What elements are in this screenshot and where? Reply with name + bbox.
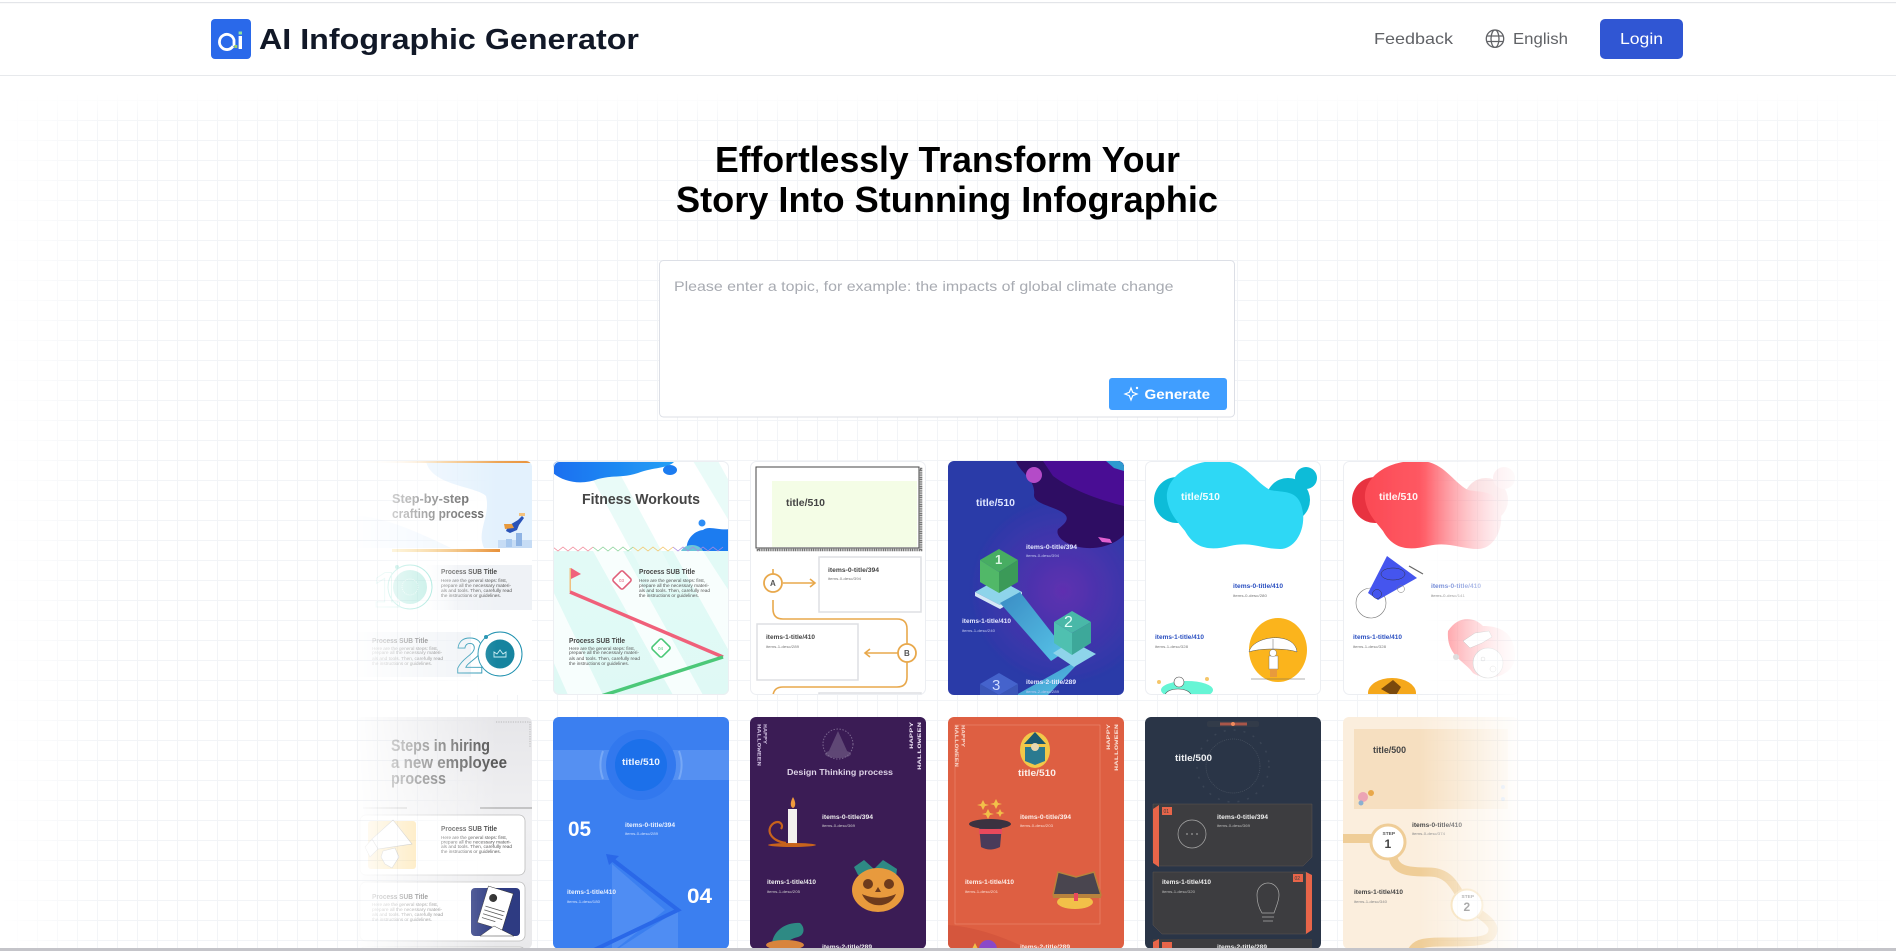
feedback link: Feedback — [1374, 31, 1454, 48]
card: cyan blob: items-1-desc/328 — [1155, 645, 1188, 649]
card: step-by-step crafting process: Here are the general steps: first, — [372, 646, 438, 651]
generate button — [1109, 378, 1227, 410]
card: isometric stairs: 1 — [995, 552, 1002, 567]
card: steps in hiring: Process SUB Title — [372, 894, 428, 901]
card: isometric stairs: items-2-desc/289 — [1026, 690, 1059, 694]
card: step-by-step crafting process: als and tools. Then, carefully read — [441, 588, 513, 593]
card: flow with A and B steps: B — [904, 649, 910, 658]
placeholder text: Please enter a topic, for example: the impacts of global climate change — [674, 278, 1174, 294]
card: red blob: title/510 — [1379, 492, 1418, 503]
card: dark panels: items-2-title/289 — [1217, 945, 1268, 951]
card: orange halloween: items-0-title/394 — [1020, 815, 1072, 821]
card: flow with A and B steps: items-0-desc/394 — [828, 577, 861, 581]
language selector: English — [1513, 31, 1568, 48]
card: dark panels: items-1-title/410 — [1162, 880, 1212, 886]
card: red blob: items-0-desc/141 — [1431, 594, 1465, 598]
card: isometric stairs: title/510 — [976, 498, 1015, 509]
card: dark panels: title/500 — [1175, 753, 1212, 764]
card: cyan blob — [1145, 461, 1321, 699]
card: dark panels — [1145, 717, 1321, 951]
card: steps in hiring: Here are the general steps: first, — [441, 835, 507, 840]
card: cyan blob: items-0-desc/280 — [1233, 594, 1267, 598]
card: step path: STEP — [1382, 831, 1396, 837]
card: design thinking halloween: HALLOWEEN — [916, 722, 923, 770]
card: step path: 2 — [1464, 900, 1470, 914]
card: step path: title/500 — [1373, 745, 1406, 756]
card: step-by-step crafting process: Process SUB Title — [441, 569, 497, 576]
card: step path: items-1-title/410 — [1354, 890, 1404, 896]
card: steps in hiring: Process SUB Title — [441, 826, 497, 833]
card: dark panels: 02 — [1294, 876, 1300, 882]
card: steps in hiring: process — [391, 770, 446, 788]
card: fitness workouts: Here are the general steps: first, — [639, 578, 705, 583]
card: steps in hiring: Steps in hiring — [391, 737, 490, 755]
card: fitness workouts: Process SUB Title — [569, 638, 625, 645]
card: fitness workouts: als and tools. Then, carefully read — [639, 588, 711, 593]
card: orange halloween: title/510 — [1018, 768, 1056, 778]
card: flow with A and B steps — [750, 461, 926, 703]
card: fitness workouts: 03 — [619, 578, 625, 583]
card: steps in hiring — [356, 717, 532, 951]
card: steps in hiring: prepare all the necessary materi- — [441, 840, 512, 844]
brand name: AI Infographic Generator — [259, 24, 639, 56]
card: cyan blob: items-1-title/410 — [1155, 635, 1205, 641]
card: dark panels: 01 — [1164, 809, 1169, 815]
card: blue numbers: title/510 — [622, 757, 660, 767]
card: design thinking halloween: items-1-title/410 — [767, 880, 817, 886]
card: fitness workouts: the instructions or guidelines. — [639, 593, 699, 598]
card: isometric stairs: items-0-title/394 — [1026, 545, 1078, 551]
card: fitness workouts: 04 — [658, 646, 664, 651]
card: orange halloween: HAPPY — [960, 725, 966, 748]
card: isometric stairs: 2 — [1064, 614, 1073, 631]
card: step path — [1343, 717, 1519, 951]
card: blue numbers: items-1-desc/180 — [567, 900, 600, 904]
card: red blob: items-0-title/410 — [1431, 584, 1482, 590]
login button: Login — [1620, 31, 1663, 48]
card: flow with A and B steps: items-1-desc/289 — [766, 645, 799, 649]
card: step-by-step crafting process: Here are the general steps: first, — [441, 578, 507, 583]
card: orange halloween: HALLOWEEN — [953, 725, 960, 767]
card: step-by-step crafting process: Step-by-step — [392, 492, 469, 506]
card: isometric stairs: 3 — [992, 677, 1000, 694]
card: orange halloween: items-0-desc/203 — [1020, 824, 1053, 828]
card: fitness workouts: prepare all the necessary materi- — [639, 583, 710, 588]
card: orange halloween: items-1-desc/201 — [965, 890, 998, 894]
navigation bar — [0, 0, 1896, 76]
icon: logo — [211, 19, 251, 59]
card: steps in hiring: the instructions or guidelines. — [372, 917, 432, 922]
card: orange halloween — [948, 717, 1124, 951]
card: design thinking halloween — [750, 717, 926, 951]
card: cyan blob: title/510 — [1181, 492, 1220, 503]
card: orange halloween: items-2-title/289 — [1020, 945, 1071, 951]
card: dark panels: items-0-title/394 — [1217, 815, 1269, 821]
main heading: Effortlessly Transform Your — [715, 139, 1180, 180]
card: blue numbers — [553, 717, 729, 951]
card: orange halloween: HALLOWEEN — [1113, 724, 1120, 771]
card: red blob: items-1-title/410 — [1353, 635, 1403, 641]
card: step path: items-1-desc/340 — [1354, 900, 1387, 904]
card: steps in hiring: the instructions or guidelines. — [441, 849, 501, 854]
card: step-by-step crafting process: the instructions or guidelines. — [372, 661, 432, 666]
card: fitness workouts: prepare all the necessary materi- — [569, 650, 640, 655]
card: flow with A and B steps: title/510 — [786, 498, 825, 509]
card: step path: STEP — [1462, 894, 1475, 900]
card: design thinking halloween: HAPPY — [908, 721, 915, 749]
card: step-by-step crafting process — [356, 461, 532, 695]
card: step-by-step crafting process: 2 — [456, 628, 484, 684]
card: step-by-step crafting process: 1 — [373, 562, 401, 618]
main heading: Story Into Stunning Infographic — [676, 179, 1218, 220]
card: fitness workouts: als and tools. Then, carefully read — [569, 656, 641, 661]
card: design thinking halloween: items-2-title/289 — [822, 945, 873, 951]
card: step-by-step crafting process: the instructions or guidelines. — [441, 593, 501, 598]
card: blue numbers: items-1-title/410 — [567, 890, 617, 896]
card: design thinking halloween: items-0-desc/369 — [822, 824, 855, 828]
card: red blob — [1343, 461, 1508, 695]
login button — [1600, 19, 1683, 59]
card: blue numbers: items-0-desc/289 — [625, 832, 658, 836]
card: design thinking halloween: HAPPY — [762, 724, 768, 745]
card: step path: 1 — [1384, 837, 1392, 851]
card: flow with A and B steps: items-1-title/410 — [766, 635, 816, 641]
card: isometric stairs: items-2-title/289 — [1026, 680, 1077, 686]
card: flow with A and B steps: A — [770, 579, 776, 588]
card: fitness workouts: Fitness Workouts — [582, 491, 700, 508]
card: step-by-step crafting process: als and tools. Then, carefully read — [372, 656, 444, 661]
card: steps in hiring: als and tools. Then, carefully read — [372, 912, 444, 917]
card: design thinking halloween: Design Thinking process — [787, 768, 894, 777]
main heading — [676, 139, 1218, 220]
card: blue numbers: items-0-title/394 — [625, 823, 676, 829]
card: flow with A and B steps: items-0-title/394 — [828, 568, 880, 574]
card: blue numbers: 04 — [687, 885, 712, 908]
card: steps in hiring: a new employee — [391, 754, 507, 772]
card: steps in hiring: prepare all the necessary materi- — [372, 907, 443, 912]
card: orange halloween: HAPPY — [1105, 723, 1112, 750]
template gallery — [356, 461, 1519, 951]
card: isometric stairs: items-1-title/410 — [962, 619, 1012, 625]
card: fitness workouts — [553, 461, 729, 697]
card: blue numbers: 05 — [568, 818, 591, 841]
card: step-by-step crafting process: prepare all the necessary materi- — [441, 583, 512, 588]
card: isometric stairs: items-0-desc/394 — [1026, 554, 1059, 558]
card: fitness workouts: Process SUB Title — [639, 569, 695, 576]
card: design thinking halloween: HALLOWEEN — [756, 724, 762, 766]
card: steps in hiring: Here are the general steps: first, — [372, 902, 438, 907]
icon: globe — [1486, 30, 1504, 47]
card: steps in hiring: als and tools. Then, carefully read — [441, 844, 513, 849]
card: step-by-step crafting process: crafting process — [392, 507, 484, 521]
topic input box — [660, 260, 1234, 417]
bottom window edge — [0, 948, 1896, 951]
card: step-by-step crafting process: Process SUB Title — [372, 638, 428, 645]
card: dark panels: items-0-desc/369 — [1217, 824, 1250, 828]
card: fitness workouts: Here are the general steps: first, — [569, 646, 635, 651]
card: dark panels: items-1-desc/320 — [1162, 890, 1195, 894]
card: orange halloween: items-1-title/410 — [965, 880, 1015, 886]
card: red blob: items-1-desc/328 — [1353, 645, 1386, 649]
card: isometric stairs — [948, 461, 1124, 706]
card: step-by-step crafting process: prepare all the necessary materi- — [372, 650, 443, 655]
card: cyan blob: items-0-title/410 — [1233, 584, 1284, 590]
generate button: Generate — [1144, 386, 1210, 402]
card: step path: items-0-title/410 — [1412, 823, 1463, 829]
card: isometric stairs: items-1-desc/240 — [962, 629, 995, 633]
card: design thinking halloween: items-1-desc/205 — [767, 890, 800, 894]
card: design thinking halloween: items-0-title/394 — [822, 815, 874, 821]
card: step path: items-0-desc/374 — [1412, 832, 1445, 836]
card: fitness workouts: the instructions or guidelines. — [569, 661, 629, 666]
